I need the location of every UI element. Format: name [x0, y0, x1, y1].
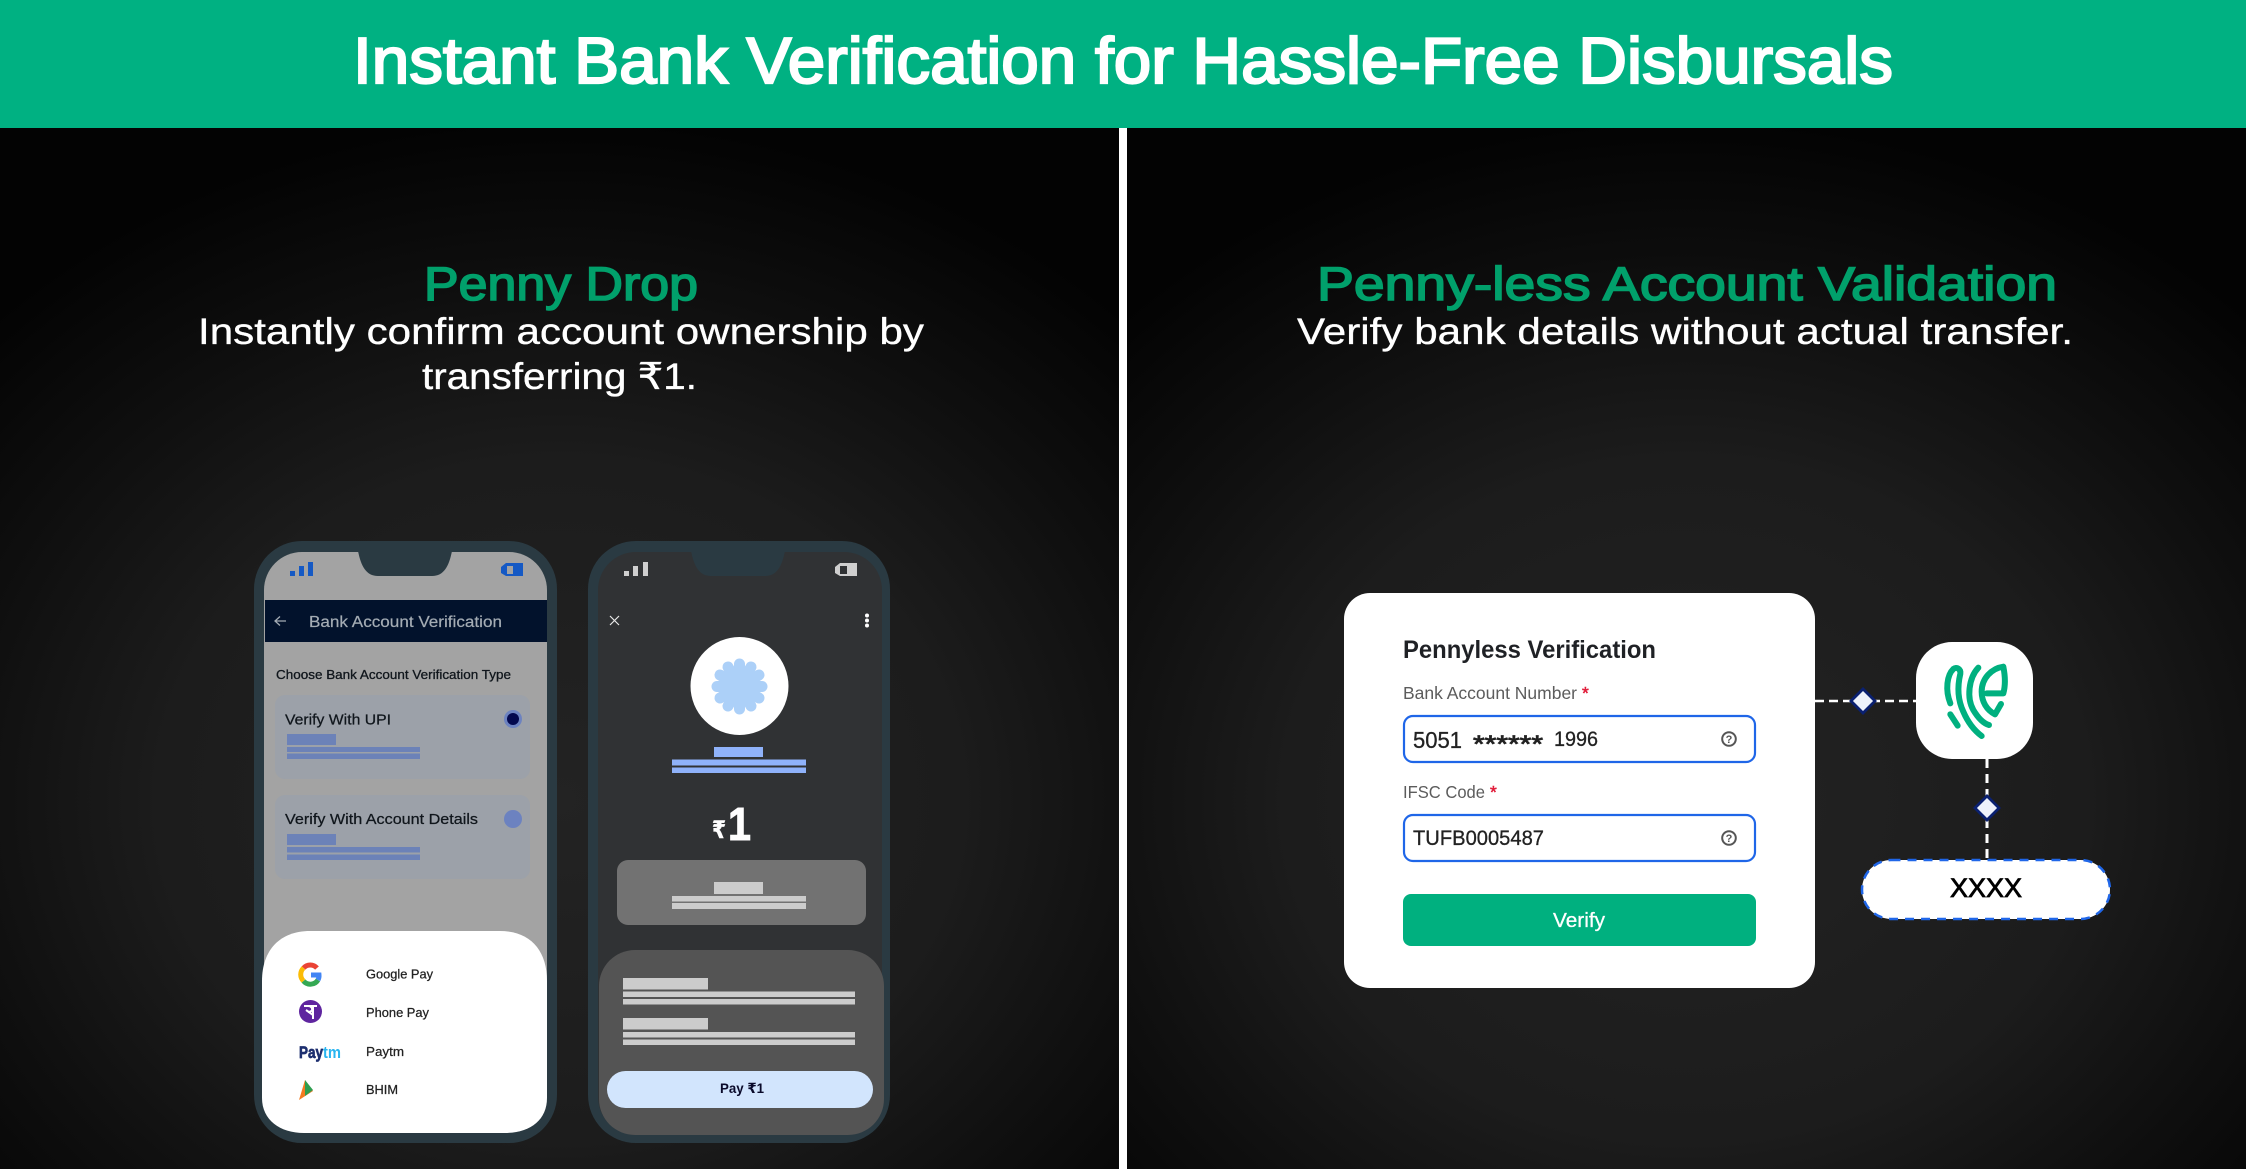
verify button: Verify: [1553, 910, 1605, 932]
pay button: [607, 1071, 873, 1108]
option card: UPI: Verify With UPI: [285, 712, 391, 728]
text: penny drop description: transferring ₹1.: [422, 356, 697, 397]
amount: rupee 1: 1: [728, 798, 751, 850]
info box: [617, 860, 866, 925]
text: penny drop description: Instantly confirm account ownership by: [198, 311, 925, 352]
text: penny drop description: [198, 311, 925, 397]
panel: penny-less heading: [1297, 257, 2073, 352]
icon: help: ?: [1726, 833, 1733, 845]
icon: Paytm: Pay: [299, 1043, 323, 1062]
label: Phone Pay: Phone Pay: [366, 1005, 429, 1020]
verification form card: [1344, 593, 1815, 988]
label: Paytm: Paytm: [366, 1044, 404, 1059]
background: right panel: [1127, 128, 2246, 1169]
merchant logo: [690, 637, 788, 735]
notch: [358, 551, 452, 576]
phone frame: [254, 541, 557, 1143]
connector: shield to token: [1986, 759, 1988, 860]
label: IFSC code: *: [1490, 782, 1497, 802]
marker: diamond on horizontal connector: [1851, 689, 1875, 713]
payment details panel: [599, 950, 884, 1135]
icon: shield fingerprint logo: [1916, 642, 2033, 759]
icon: menu dots: [865, 614, 869, 628]
phone screen: [598, 552, 882, 1135]
phone screen: [264, 552, 547, 1112]
app header: [265, 600, 547, 642]
label: BHIM: BHIM: [366, 1082, 398, 1097]
option card: account details: Verify With Account Details: [285, 811, 478, 828]
merchant placeholder bars: [672, 747, 806, 773]
input: account number: ******: [1473, 731, 1543, 758]
label: bank account number: *: [1582, 683, 1589, 703]
text: penny-less description: Verify bank details without actual transfer.: [1297, 311, 2073, 352]
phone: bank account verification screen: [254, 541, 557, 1143]
icon: help: ?: [1726, 734, 1733, 746]
icon: help: [1722, 831, 1736, 845]
center divider: [1119, 128, 1127, 1169]
background: left panel: [0, 128, 1119, 1169]
heading: Penny-less Account Validation: Penny-less Account Validation: [1317, 257, 2057, 310]
option card: account details: [275, 795, 530, 879]
amount: rupee 1: [712, 798, 751, 850]
label: bank account number: Bank Account Number: [1403, 683, 1577, 703]
icon: signal: [290, 562, 313, 576]
label: Google Pay: Google Pay: [366, 966, 433, 982]
amount: rupee 1: ₹: [712, 817, 726, 844]
phone frame: [588, 541, 890, 1143]
icon: PhonePe: [299, 1000, 322, 1023]
form title: Pennyless Verification: [1403, 636, 1656, 664]
heading: Penny Drop: Penny Drop: [424, 257, 698, 310]
label: IFSC code: IFSC Code: [1403, 782, 1485, 802]
connector: form to shield: [1815, 700, 1916, 702]
title: Instant Bank Verification for Hassle-Free Disbursals: [353, 24, 1893, 97]
token pill: XXXX: [1862, 860, 2110, 919]
title banner: [0, 0, 2246, 128]
icon: signal: [624, 562, 648, 576]
pay button: Pay ₹1: [720, 1080, 764, 1096]
input: IFSC: [1404, 815, 1755, 861]
header title: Bank Account Verification: [309, 614, 502, 631]
verify button: [1403, 894, 1756, 946]
marker: diamond on vertical connector: [1975, 796, 1999, 820]
option card: UPI: [275, 695, 530, 779]
icon: back arrow: [275, 616, 286, 626]
icon: battery: [835, 563, 857, 576]
input: IFSC: TUFB0005487: [1413, 827, 1544, 850]
text: choose type: Choose Bank Account Verification Type: [276, 667, 511, 682]
input: account number: 1996: [1554, 728, 1598, 751]
input: account number: [1404, 716, 1755, 762]
token pill: XXXX: XXXX: [1950, 873, 2022, 903]
notch: [691, 551, 785, 576]
payment apps sheet: [262, 931, 547, 1133]
icon: Paytm: tm: [323, 1043, 341, 1062]
panel: penny drop heading: [198, 257, 925, 397]
input: account number: 5051: [1413, 727, 1462, 753]
icon: help: [1722, 732, 1736, 746]
icon: BHIM: [299, 1080, 313, 1100]
phone: pay one rupee screen: [588, 541, 890, 1143]
icon: Google: [301, 965, 319, 984]
icon: close: [610, 616, 619, 625]
icon: battery: [501, 563, 523, 576]
